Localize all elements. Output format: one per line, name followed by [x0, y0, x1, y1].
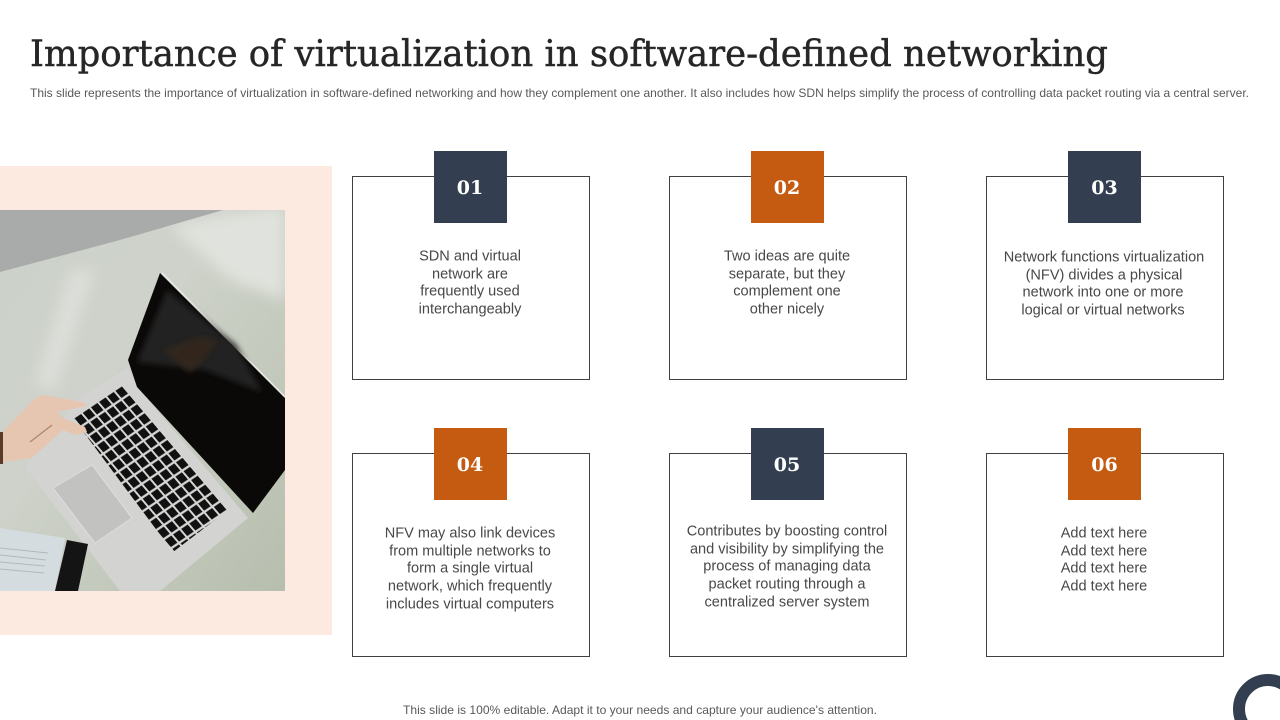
- card text: Network functions virtualization: [1004, 250, 1204, 266]
- card text: NFV may also link devices: [385, 526, 555, 542]
- screen top edge: [162, 273, 285, 397]
- number 03: 03: [1091, 177, 1118, 199]
- card text: packet routing through a: [709, 576, 866, 592]
- title: Importance of virtualization in software-defined networking: [30, 34, 1108, 75]
- hand shape: [3, 395, 87, 462]
- card text: process of managing data: [703, 558, 872, 574]
- card frame: [670, 454, 906, 656]
- number badge 05: [751, 428, 824, 500]
- notebook spine: [55, 540, 88, 591]
- cloth highlight: [178, 210, 285, 300]
- card text: from multiple networks to: [389, 544, 551, 560]
- card text: Two ideas are quite: [724, 248, 850, 264]
- card text: Add text here: [1061, 526, 1147, 542]
- corner ring: [1239, 680, 1280, 720]
- card text: includes virtual computers: [386, 596, 554, 612]
- subtitle: This slide represents the importance of virtualization in software-defined networking and how they complement one another. It also includes how SDN helps simplify the process of controlling data packet routing via a central server.: [30, 86, 1249, 100]
- panel: photo backdrop: [0, 166, 332, 635]
- trackpad: [53, 465, 132, 543]
- number badge 01: [434, 151, 507, 223]
- card frame: [352, 176, 590, 380]
- card frame: [986, 454, 1224, 656]
- notebook text lines: [0, 548, 48, 573]
- number badge 06: [1068, 428, 1141, 500]
- card 06: [986, 428, 1224, 656]
- card text: Contributes by boosting control: [687, 524, 887, 540]
- card text: other nicely: [750, 302, 825, 318]
- card text: logical or virtual networks: [1021, 302, 1185, 318]
- cloth fold: [39, 271, 90, 386]
- number 04: 04: [457, 454, 483, 476]
- number badge 02: [751, 151, 824, 223]
- laptop base: [25, 368, 248, 591]
- card 01: [352, 151, 590, 380]
- cloth background: [0, 210, 285, 591]
- number 02: 02: [774, 177, 800, 199]
- screen reflection: [137, 290, 262, 392]
- keyboard: [73, 385, 228, 552]
- laptop screen: [128, 273, 285, 513]
- card text: frequently used: [420, 284, 520, 300]
- card 03: [986, 151, 1224, 380]
- number badge 04: [434, 428, 507, 500]
- finger shadow: [30, 425, 52, 442]
- card text: form a single virtual: [407, 560, 533, 576]
- card text: separate, but they: [729, 266, 846, 282]
- card text: network into one or more: [1023, 284, 1183, 300]
- number 01: 01: [457, 177, 483, 199]
- card text: and visibility by simplifying the: [690, 542, 884, 558]
- card text: Add text here: [1061, 560, 1147, 576]
- grey wall: [0, 210, 223, 272]
- hand: [3, 395, 87, 462]
- card text: SDN and virtual: [419, 248, 521, 264]
- card frame: [670, 176, 906, 380]
- notebook: [0, 528, 65, 591]
- card text: interchangeably: [419, 302, 522, 318]
- card text: (NFV) divides a physical: [1026, 268, 1182, 284]
- number badge 03: [1068, 151, 1141, 223]
- card 04: [352, 428, 590, 656]
- card 05: [670, 428, 906, 656]
- card text: Add text here: [1061, 544, 1147, 560]
- card frame: [986, 176, 1224, 380]
- card text: centralized server system: [705, 594, 869, 610]
- card text: Add text here: [1061, 578, 1147, 594]
- card text: complement one: [733, 284, 841, 300]
- watch band: [0, 432, 3, 464]
- card text: network are: [432, 266, 508, 282]
- card frame: [352, 454, 590, 656]
- card text: network, which frequently: [388, 578, 553, 594]
- footer note: This slide is 100% editable. Adapt it to your needs and capture your audience's attention.: [403, 703, 877, 717]
- reflected hand: [168, 338, 214, 374]
- number 06: 06: [1091, 454, 1118, 476]
- card 02: [670, 151, 906, 380]
- photo: laptop on sofa: [0, 205, 285, 591]
- number 05: 05: [774, 454, 800, 476]
